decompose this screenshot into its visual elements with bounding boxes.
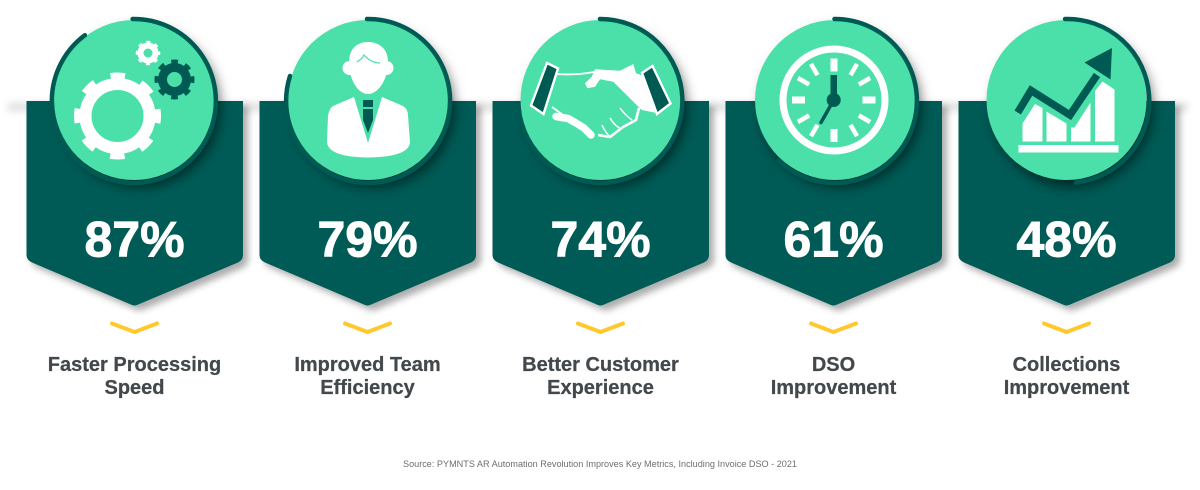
icon: handshake <box>531 63 670 137</box>
value: 61% <box>783 212 884 268</box>
chevron <box>112 324 157 332</box>
panel: better customer experience <box>492 19 709 399</box>
icon: growth chart <box>1018 48 1118 152</box>
chevron <box>345 324 390 332</box>
source note: Source: PYMNTS AR Automation Revolution Improves Key Metrics, Including Invoice DSO - 2021 <box>403 459 797 469</box>
label: Improvement <box>1004 377 1130 399</box>
badge shape <box>726 101 942 306</box>
label: Efficiency <box>320 377 416 399</box>
icon: person <box>327 42 410 158</box>
badge shape <box>260 101 476 306</box>
icon: gears <box>78 42 192 155</box>
label: Improved Team <box>294 354 441 376</box>
panel: improved team efficiency <box>260 19 476 399</box>
label: Experience <box>547 377 654 399</box>
icon circle <box>52 19 216 183</box>
chevron <box>811 324 856 332</box>
chevron <box>578 324 623 332</box>
label: Better Customer <box>522 354 679 376</box>
icon circle <box>986 19 1149 182</box>
badge shape <box>492 101 709 306</box>
label: Faster Processing <box>48 354 221 376</box>
label: Collections <box>1013 354 1120 376</box>
icon circle <box>286 19 450 183</box>
label: Improvement <box>771 377 897 399</box>
icon: clock <box>783 49 885 151</box>
value: 79% <box>317 212 418 268</box>
value: 74% <box>550 212 651 268</box>
panel: collections improvement <box>958 19 1175 399</box>
panel: DSO improvement <box>726 19 942 399</box>
value: 48% <box>1016 212 1117 268</box>
chevron <box>1044 324 1089 332</box>
value: 87% <box>84 212 185 268</box>
icon circle <box>519 19 682 183</box>
label: DSO <box>812 354 855 376</box>
badge shape <box>26 101 243 306</box>
icon circle <box>755 19 917 183</box>
badge shape <box>958 101 1175 306</box>
label: Speed <box>104 377 165 399</box>
panel: faster processing speed <box>26 19 243 399</box>
